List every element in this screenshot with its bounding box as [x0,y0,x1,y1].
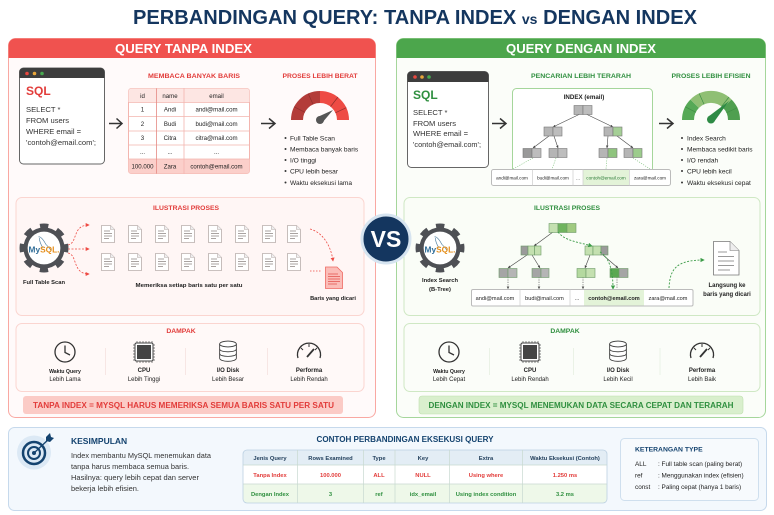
list: proses efisien [681,135,753,187]
text: disk: I/O Disk [217,368,240,374]
icon: performance gauge [690,343,714,358]
diagram: index tree: INDEX (email) [564,94,604,101]
table: baris: contoh@email.com [190,164,243,170]
table: baris: ... [214,149,219,156]
icon: mysql gear [418,226,462,270]
arrow: table to gauge [261,118,275,128]
panel: kesimpulan [8,428,766,510]
SQL window: 'contoh@email.com'; [413,140,481,149]
text: kesimpulan body: Index membantu MySQL menemukan data [71,451,212,460]
list: proses efisien: Waktu eksekusi cepat [687,180,751,187]
SQL window [408,72,488,168]
table: baris: budi@mail.com [195,121,238,128]
index row: budi@mail.com [537,176,569,180]
table: perbandingan eksekusi: ref [375,492,383,498]
table: perbandingan eksekusi [243,450,607,503]
header: query dengan index [396,38,766,58]
data row: ... [575,296,580,302]
arrow: SQL to table [109,118,122,128]
panel: keterangan type: ref [635,472,643,480]
text: performa: Lebih Baik [688,377,717,383]
label: langsung ke baris [703,283,751,298]
banner: tanpa index [23,396,343,414]
text: kesimpulan body [71,451,212,493]
text: waktu query: Waktu Query [433,369,465,375]
table: perbandingan eksekusi: Key [418,456,429,462]
table: baris: Budi [164,121,176,128]
heading: proses lebih efisien: PROSES LEBIH EFISIEN [672,73,751,80]
panel: keterangan type: : Full table scan (paling berat) [658,461,742,468]
table: perbandingan eksekusi: 100.000 [320,473,341,479]
banner: dengan index [419,396,743,414]
panel: keterangan type: : Paling cepat (hanya 1 baris) [658,484,741,491]
icon: cpu [133,341,155,363]
arrow: to target row [310,229,333,261]
panel: keterangan type: : Menggunakan index (efisien) [658,472,744,480]
text: disk: Lebih Kecil [603,377,633,383]
table: perbandingan eksekusi: 3 [329,492,333,498]
table: baris: email [209,93,224,100]
diagram: b-tree search [499,224,628,289]
arrow: tree to gauge [659,118,673,128]
header: query tanpa index [8,38,376,58]
text: kesimpulan body: Hasilnya: query lebih cepat dan server [71,473,200,482]
table: perbandingan eksekusi: 3.2 ms [556,492,574,498]
arrows: gear to rows [68,225,89,274]
list: proses berat: Full Table Scan [290,135,335,142]
data row: budi@mail.com [525,296,564,302]
icon: target [17,433,54,470]
title: PERBANDINGAN QUERY: TANPA INDEX vs DENGAN INDEX [133,7,698,29]
data row: zara@mail.com [649,296,688,302]
index row: andi@mail.com [496,176,528,180]
banner: dengan index: DENGAN INDEX = MYSQL MENEMUKAN DATA SECARA CEPAT DAN TERARAH [428,401,734,410]
arrow: SQL to tree [492,118,506,128]
table: baris: id [140,93,145,100]
table: baris: Zara [164,164,177,170]
table: perbandingan eksekusi: Dengan Index [251,492,290,498]
label: langsung ke baris: baris yang dicari [703,292,751,298]
list: proses berat: I/O tinggi [290,157,317,164]
label: index search: Index Search [422,278,458,284]
icon: clock [439,342,459,362]
SQL window: SQL [413,88,438,102]
heading: kesimpulan: KESIMPULAN [71,436,127,446]
icon: document [714,242,739,275]
text: kesimpulan body: tanpa harus membaca semua baris. [71,462,189,471]
list: proses efisien: Membaca sedikit baris [687,146,753,153]
table: perbandingan eksekusi: Using where [469,473,504,479]
table: perbandingan eksekusi: idx_email [410,492,437,498]
data row [472,290,693,306]
table: perbandingan eksekusi: Jenis Query [253,456,287,462]
panel: keterangan type: ALL [635,461,647,468]
table: baris: Andi [164,106,176,114]
badge: VS: VS [371,226,401,252]
table: perbandingan eksekusi: Tanpa Index [253,473,287,479]
banner: tanpa index: TANPA INDEX = MYSQL HARUS MEMERIKSA SEMUA BARIS SATU PER SATU [33,401,334,410]
panel: query dengan index [396,38,766,418]
table: baris: Citra [164,135,177,142]
panel: keterangan type: KETERANGAN TYPE [635,446,703,454]
icon: performance gauge [298,343,320,358]
label: baris yang dicari: Baris yang dicari [310,296,356,302]
text: disk: I/O Disk [607,368,630,374]
panel: dampak dengan index [404,324,760,392]
data row: andi@mail.com [476,296,515,302]
index row: contoh@email.com [586,176,626,180]
icon: cpu [519,341,541,363]
documents: row scan [102,226,300,270]
index row: zara@mail.com [634,176,666,180]
panel: dampak tanpa index [16,324,364,392]
gauge: berat [294,94,346,124]
text: cpu: CPU [138,368,150,374]
text: performa [688,368,717,383]
table: perbandingan eksekusi: ALL [373,473,385,479]
data row: contoh@email.com [588,296,640,302]
icon: disk [610,341,626,361]
panel: keterangan type: const [635,484,650,491]
text: waktu query [433,369,466,383]
table: baris: citra@mail.com [195,135,238,142]
icon: mysql gear [22,226,66,270]
table: baris: 100.000 [131,164,154,170]
table: baris: 1 [141,106,145,114]
table: baris: ... [140,149,145,156]
text: performa [290,368,328,383]
table: perbandingan eksekusi: 1.250 ms [553,473,577,479]
table: baris: andi@mail.com [195,106,238,114]
text: kesimpulan body: bekerja lebih efisien. [71,484,139,493]
text: waktu query: Lebih Lama [49,377,81,383]
SQL window [20,68,104,164]
header: query tanpa index: QUERY TANPA INDEX [115,41,252,56]
heading: pencarian lebih terarah: PENCARIAN LEBIH TERARAH [531,73,631,80]
heading: ilustrasi proses: ILUSTRASI PROSES [153,205,220,212]
SQL window: FROM users [413,119,456,128]
list: proses berat [284,135,359,187]
panel: ilustrasi proses dengan index [404,198,760,316]
text: performa: Lebih Rendah [290,377,328,383]
label: index search: (B-Tree) [429,287,451,293]
SQL window: SELECT * [413,108,448,117]
panel: ilustrasi proses tanpa index [16,198,364,316]
label: memeriksa: Memeriksa setiap baris satu per satu [136,283,243,289]
text: cpu: CPU [524,368,536,374]
table: perbandingan eksekusi: Type [372,456,386,462]
text: performa: Performa [689,368,716,374]
index row: ... [576,176,580,180]
index row [492,170,670,186]
SQL window: SQL [26,84,51,98]
table: perbandingan eksekusi: Extra [479,456,494,462]
table: baris: 3 [141,135,145,142]
SQL window: SELECT * [26,105,61,114]
diagram: index tree [512,88,652,172]
list: proses efisien: I/O rendah [687,157,718,164]
table: perbandingan eksekusi: Using index condition [456,492,517,498]
text: cpu: Lebih Tinggi [128,377,160,383]
text: cpu [128,368,160,383]
heading: contoh perbandingan: CONTOH PERBANDINGAN EKSEKUSI QUERY [316,435,494,444]
panel: keterangan type [620,438,758,500]
arrow: to document [669,260,704,288]
table: baris: ... [167,149,173,156]
text: waktu query [49,369,81,383]
table: perbandingan eksekusi: NULL [415,473,431,479]
list: proses efisien: CPU lebih kecil [687,168,732,175]
heading: dampak: DAMPAK [166,328,196,335]
heading: membaca banyak baris: MEMBACA BANYAK BARIS [148,73,240,80]
SQL window: WHERE email = [26,127,82,136]
list: proses efisien: Index Search [687,135,726,142]
table: perbandingan eksekusi: Waktu Eksekusi (Contoh) [530,456,600,462]
icon: clock [55,342,75,362]
list: proses berat: Membaca banyak baris [290,146,359,153]
panel: query tanpa index [8,38,376,418]
header: query dengan index: QUERY DENGAN INDEX [506,41,656,56]
SQL window: FROM users [26,116,69,125]
text: waktu query: Lebih Cepat [433,377,466,383]
text: disk: Lebih Besar [212,377,244,383]
text: cpu [511,368,549,383]
table: baris [128,88,250,174]
icon: target document [326,267,342,288]
text: disk [603,368,633,383]
list: proses berat: CPU lebih besar [290,168,339,175]
label: full table scan: Full Table Scan [23,280,66,286]
heading: dampak: DAMPAK [550,328,580,335]
SQL window: WHERE email = [413,129,469,138]
label: langsung ke baris: Langsung ke [708,283,746,289]
gauge: efisien [685,94,737,124]
label: index search [422,278,458,293]
connector: dotted to target [310,270,322,272]
text: cpu: Lebih Rendah [511,377,549,383]
icon: disk [220,341,236,361]
table: baris: 2 [141,121,145,128]
text: disk [212,368,244,383]
table: baris: name [162,93,178,100]
text: performa: Performa [296,368,323,374]
heading: ilustrasi proses: ILUSTRASI PROSES [534,205,601,212]
badge: VS [362,215,410,263]
list: proses berat: Waktu eksekusi lama [290,180,352,187]
text: waktu query: Waktu Query [49,369,81,375]
heading: proses lebih berat: PROSES LEBIH BERAT [282,73,358,80]
table: perbandingan eksekusi: Rows Examined [308,456,353,462]
SQL window: 'contoh@email.com'; [26,138,96,147]
